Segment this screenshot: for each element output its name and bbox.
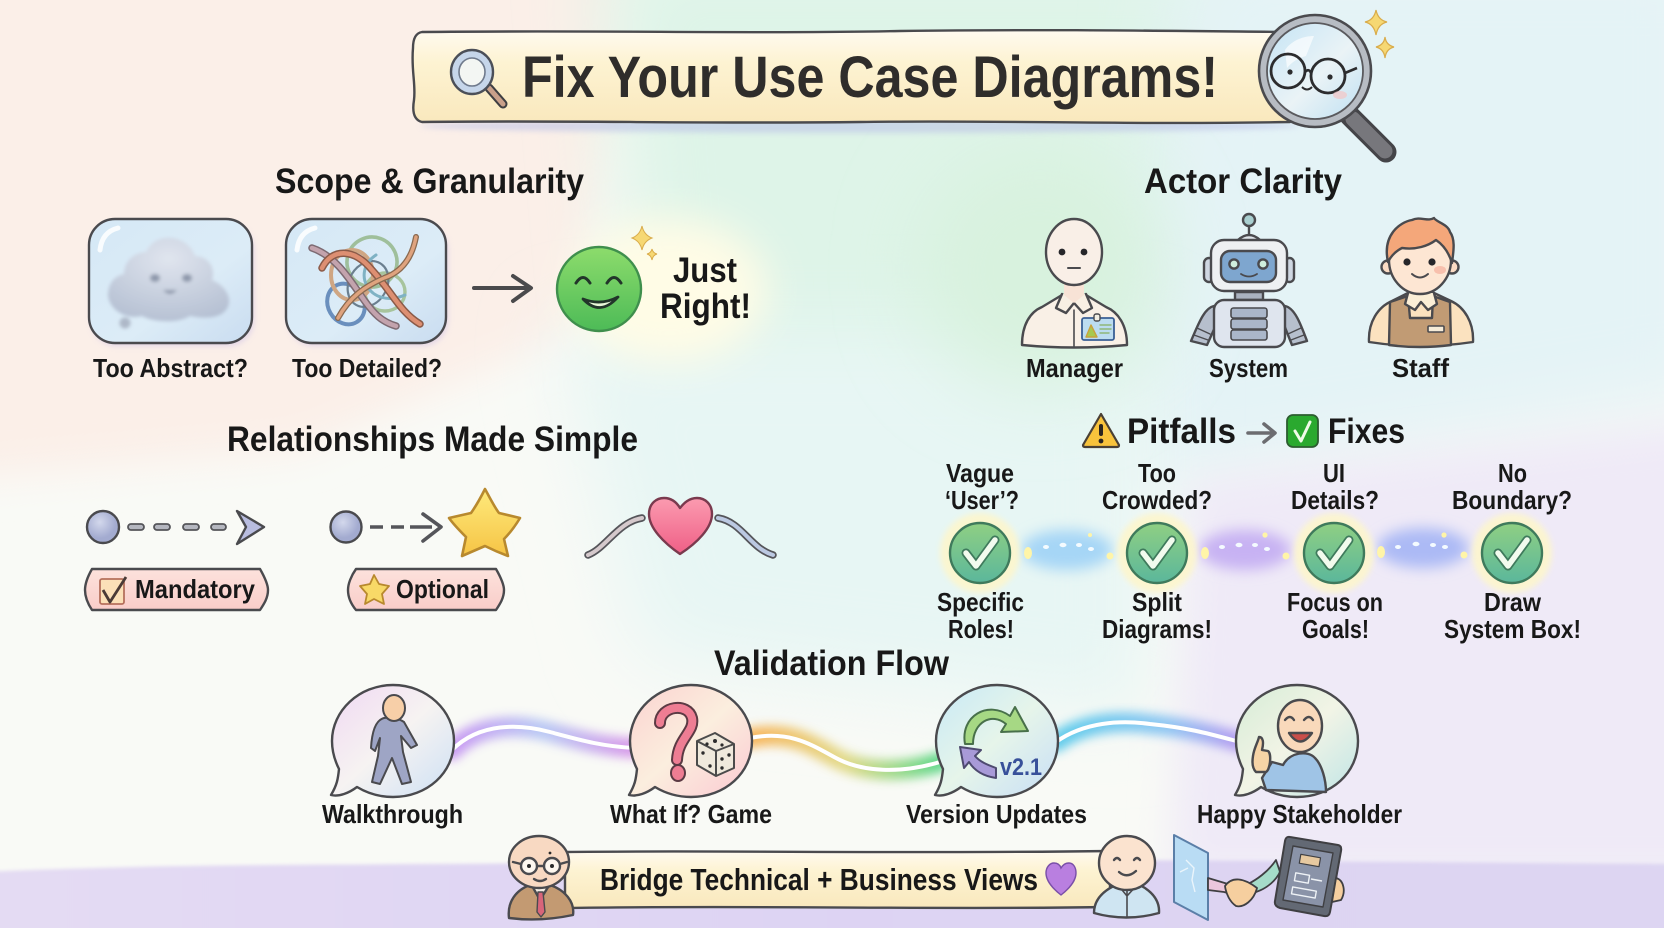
icon: heart joining two lines	[588, 498, 773, 555]
icon: smiling green face	[557, 247, 641, 331]
icon: gold star	[449, 489, 520, 556]
fixes word: Fixes	[1328, 412, 1405, 451]
actor: staff	[1369, 218, 1473, 347]
fix text	[1102, 587, 1212, 644]
glow	[572, 218, 768, 362]
icon: green check box	[1287, 415, 1318, 447]
icon: dice	[697, 733, 734, 776]
fix text: System Box!	[1444, 614, 1581, 644]
icon: warning triangle	[1083, 414, 1119, 447]
label: manager: Manager	[1026, 353, 1123, 383]
heading: Actor Clarity	[1144, 162, 1342, 201]
heading: Validation Flow	[714, 644, 950, 683]
pitfall text	[1291, 458, 1379, 515]
actor: robot system	[1191, 214, 1307, 347]
icon: green check	[1294, 513, 1374, 593]
heading: Scope & Granularity	[275, 162, 584, 201]
step: happy stakeholder bubble	[1235, 685, 1358, 797]
version label: v2.1	[1000, 754, 1042, 781]
icon: business person	[1094, 836, 1159, 918]
fix text: Split	[1132, 587, 1182, 617]
icon: question mark	[660, 708, 692, 781]
icon: gold sparkles	[1365, 10, 1394, 58]
banner shadow	[420, 119, 1300, 133]
label: what if game: What If? Game	[610, 799, 772, 829]
mandatory label: Mandatory	[135, 574, 255, 604]
mandatory tag	[85, 569, 268, 610]
fix text	[937, 587, 1024, 644]
panel: scope and granularity	[89, 162, 768, 383]
flow connectors	[452, 722, 1240, 770]
just right result: Right!	[660, 287, 751, 326]
banner text: Bridge Technical + Business Views	[600, 862, 1038, 897]
icon: blurry cloud	[108, 238, 229, 328]
fix text: Focus on	[1287, 587, 1383, 617]
pitfall text: UI	[1323, 458, 1345, 488]
icon: tangled lines	[312, 230, 420, 331]
icon: big magnifier with glasses	[1259, 15, 1386, 152]
fix text: Specific	[937, 587, 1024, 617]
label: happy stakeholder: Happy Stakeholder	[1197, 799, 1402, 829]
panel: relationships	[85, 420, 773, 610]
pitfall text: Boundary?	[1452, 485, 1572, 515]
optional label: Optional	[396, 574, 489, 604]
step: version updates bubble	[935, 685, 1058, 797]
icon: green check	[1117, 513, 1197, 593]
heading: Relationships Made Simple	[227, 420, 638, 459]
optional relationship arrow	[330, 512, 441, 542]
pitfall text	[1452, 458, 1572, 515]
fix text: Goals!	[1302, 614, 1369, 644]
actor: manager	[1022, 219, 1127, 348]
arrow	[1248, 424, 1275, 442]
panel: bottom bridge banner	[509, 835, 1344, 920]
fix 4	[1444, 458, 1581, 644]
icon: technical person with glasses	[509, 836, 573, 919]
label: too abstract: Too Abstract?	[93, 353, 248, 383]
pitfall text: Details?	[1291, 485, 1379, 515]
label: system: System	[1209, 353, 1288, 383]
label: too detailed: Too Detailed?	[292, 353, 442, 383]
icon: purple refresh arrow	[960, 747, 996, 778]
fix text	[1444, 587, 1581, 644]
arrow	[474, 276, 531, 301]
step: what if game bubble	[629, 685, 752, 797]
icon: name badge	[1082, 314, 1114, 340]
pitfall text	[1102, 458, 1212, 515]
fix text: Roles!	[948, 614, 1014, 644]
pitfall text: Too	[1138, 458, 1176, 488]
optional tag	[348, 569, 504, 610]
pitfall text: ‘User’?	[945, 485, 1019, 515]
icon: blueprint panel	[1174, 835, 1208, 920]
panel: actor clarity	[1022, 162, 1473, 383]
glowing connectors	[1021, 528, 1469, 570]
icon: sparkles	[632, 226, 657, 260]
pitfall text: No	[1498, 458, 1527, 488]
panel: validation flow	[322, 644, 1402, 829]
panel: pitfalls and fixes	[937, 412, 1581, 644]
icon: green refresh arrow	[964, 707, 1028, 744]
icon: handshake	[1208, 860, 1280, 906]
pitfall text	[945, 458, 1019, 515]
icon: checked box	[100, 577, 126, 604]
card: too abstract	[89, 219, 254, 346]
just right text: Just	[673, 251, 737, 290]
just right result	[557, 218, 768, 362]
banner ribbon	[413, 30, 1290, 123]
label: staff: Staff	[1392, 353, 1449, 383]
pitfall text: Vague	[946, 458, 1014, 488]
icon: small magnifier	[451, 50, 503, 104]
icon: purple heart	[1046, 863, 1076, 895]
fix 3	[1287, 458, 1383, 644]
icon: small star	[360, 575, 389, 604]
fix 2	[1102, 458, 1212, 644]
step: walkthrough bubble	[331, 685, 454, 797]
fix 1	[937, 458, 1024, 644]
icon: green check	[940, 513, 1020, 593]
icon: tablet	[1275, 837, 1344, 916]
label: walkthrough: Walkthrough	[322, 799, 463, 829]
label: version updates: Version Updates	[906, 799, 1087, 829]
title banner	[413, 10, 1394, 152]
mandatory relationship arrow	[87, 511, 264, 544]
icon: walking figure	[371, 695, 417, 784]
fix text: Draw	[1484, 587, 1542, 617]
fix text: Diagrams!	[1102, 614, 1212, 644]
title text: Fix Your Use Case Diagrams!	[522, 45, 1218, 110]
banner ribbon	[565, 851, 1110, 908]
pitfalls word: Pitfalls	[1127, 412, 1236, 451]
card: too detailed	[286, 219, 448, 346]
pitfall text: Crowded?	[1102, 485, 1212, 515]
icon: green check	[1472, 513, 1552, 593]
fix text	[1287, 587, 1383, 644]
icon: happy person with thumbs up	[1252, 700, 1326, 792]
heading with icons	[1083, 412, 1405, 451]
